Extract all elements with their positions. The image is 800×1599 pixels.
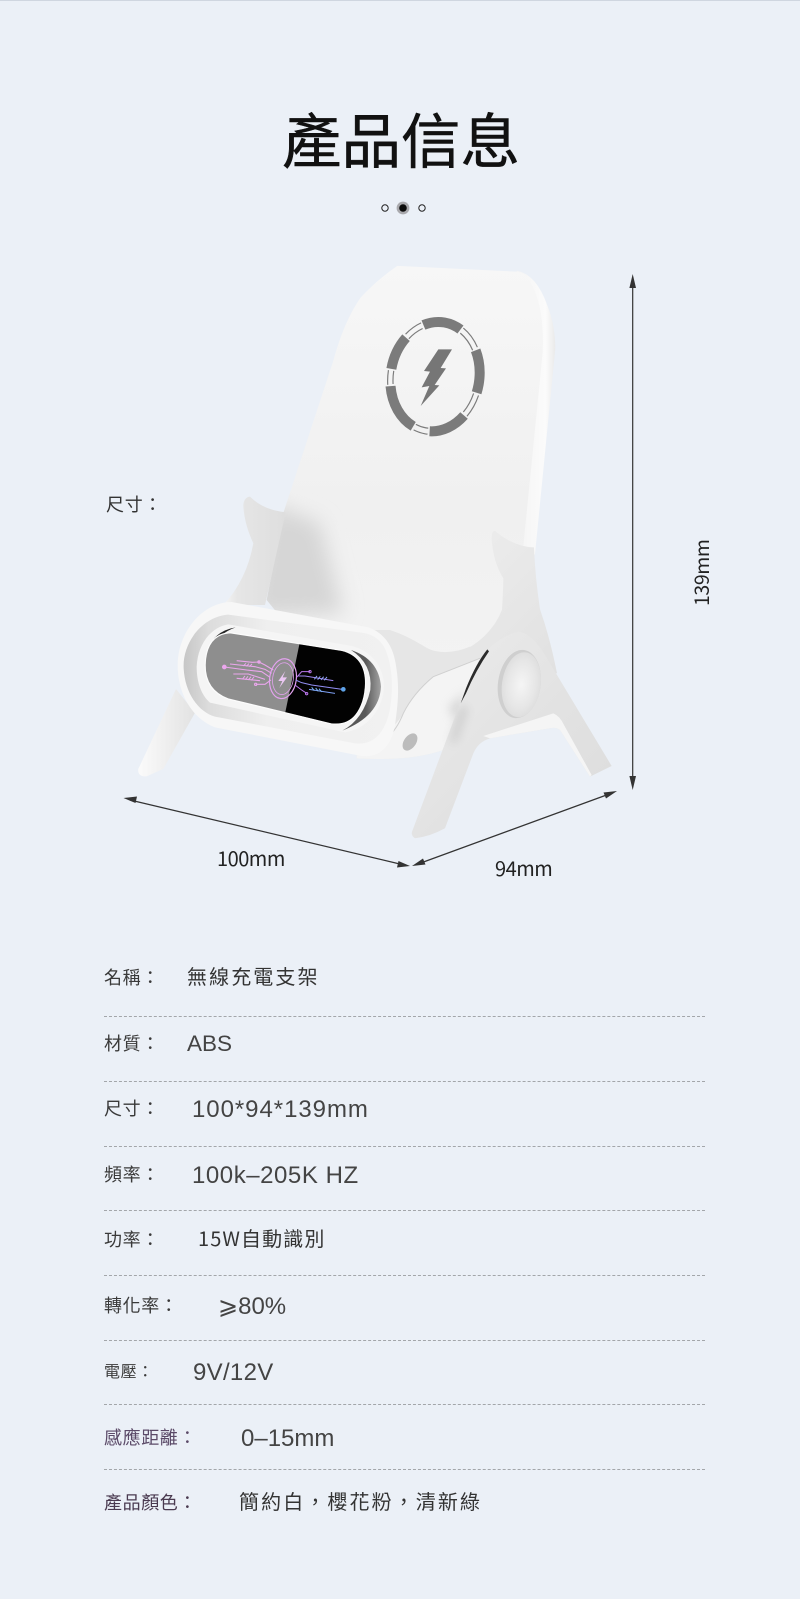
title pagination dots (381, 202, 426, 214)
lightning bolt (421, 349, 452, 406)
capsule grey lip (184, 615, 392, 744)
right side body, leg and knob (357, 630, 612, 838)
backrest face (267, 266, 543, 665)
spec row: frequency: 100k–205K HZ (192, 1162, 359, 1189)
spec row: conversion rate (104, 1292, 286, 1320)
screen (206, 634, 365, 724)
leg shadow (451, 705, 467, 743)
spec row: product colours: 產品顏色： (104, 1489, 197, 1515)
charging ring (267, 657, 299, 700)
circuit graphic right (295, 670, 345, 695)
right recess (342, 650, 381, 731)
title: 產品信息 (282, 95, 520, 181)
logo thin arcs outer (379, 311, 491, 442)
spec row: name: 名稱： (104, 964, 160, 990)
device backrest (267, 266, 555, 665)
capsule white band (197, 624, 384, 732)
body crease (387, 658, 480, 738)
spec row: conversion rate: ⩾80% (218, 1293, 286, 1320)
width arrow (124, 796, 410, 868)
spec row: product colours: 簡約白，櫻花粉，清新綠 (239, 1486, 482, 1515)
spec row: size (104, 1095, 369, 1123)
spec row: name: 無線充電支架 (187, 961, 320, 990)
capsule outer shell (178, 602, 398, 756)
side knob (493, 647, 545, 721)
spec row: size: 尺寸： (104, 1095, 160, 1121)
spec row: voltage (104, 1358, 274, 1386)
spec row: name (104, 961, 320, 990)
height arrow (629, 274, 636, 790)
spec row: power (104, 1223, 325, 1252)
spec row: power: 功率： (104, 1226, 160, 1252)
logo thin arcs inner (385, 318, 485, 435)
spec row: frequency (104, 1161, 359, 1189)
spec row: frequency: 頻率： (104, 1161, 160, 1187)
dimension label 139mm: 139mm (686, 539, 715, 606)
lower body (357, 658, 480, 759)
body soft shadow (448, 690, 466, 720)
dimension heading: 尺寸： (106, 491, 162, 517)
dark edge (461, 649, 489, 703)
capsule speaker and screen (178, 602, 398, 756)
port hole (400, 731, 420, 753)
right arm and seat lip (387, 531, 557, 705)
depth arrow (412, 791, 617, 866)
inverted v leg (412, 632, 612, 838)
dimension label 100mm: 100mm (217, 843, 285, 872)
dimension label 94mm: 94mm (495, 853, 552, 882)
leg bevel (483, 713, 592, 777)
circuit graphic left (222, 661, 273, 685)
logo thick ring (382, 315, 488, 439)
screen ring (206, 633, 365, 724)
left arm (223, 497, 286, 605)
seat band (357, 630, 487, 759)
spec row: voltage: 電壓： (104, 1358, 154, 1382)
inner wall shadow (266, 505, 344, 619)
spec row: voltage: 9V/12V (193, 1359, 274, 1386)
spec row: material: ABS (187, 1031, 232, 1056)
top left crescent (208, 627, 236, 651)
spec row: product colours (104, 1486, 482, 1515)
spec row: material: 材質： (104, 1030, 160, 1056)
backrest side edge (517, 271, 555, 555)
wireless charging logo (379, 311, 491, 442)
spec row: sensing distance (104, 1424, 334, 1452)
left leg (138, 689, 195, 776)
spec row: sensing distance: 感應距離： (104, 1424, 197, 1450)
product illustration and dimension arrows (124, 266, 636, 868)
spec row: material (104, 1030, 232, 1056)
spec row: conversion rate: 轉化率： (104, 1292, 178, 1318)
spec row: size: 100*94*139mm (192, 1096, 369, 1123)
spec row: sensing distance: 0–15mm (241, 1425, 334, 1452)
spec row: power: 15W自動識別 (198, 1223, 325, 1252)
